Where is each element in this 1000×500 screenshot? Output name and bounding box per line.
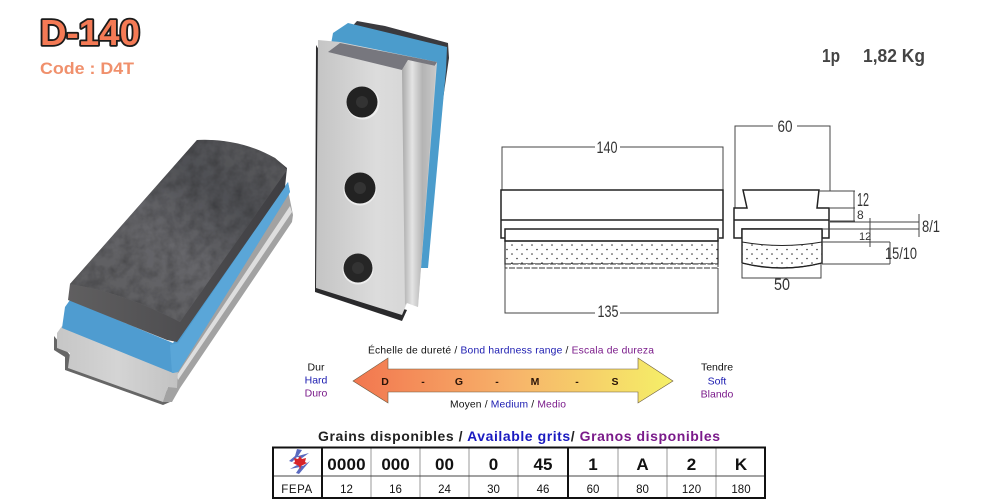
aluminium base front <box>57 326 178 402</box>
product code: Code : D4T <box>40 59 135 78</box>
grit codes: A <box>636 455 649 474</box>
FEPA values: 12 <box>340 484 353 496</box>
right dimensions: 8/1 <box>922 217 940 236</box>
right labels <box>701 362 734 400</box>
abrasive section <box>742 229 822 268</box>
grit codes: 0000 <box>327 455 366 474</box>
bolt 2 <box>344 172 376 206</box>
scale letters: - <box>421 376 425 388</box>
bolt 3 <box>342 254 374 284</box>
FEPA values: 180 <box>731 484 751 496</box>
dimension 135: 135 <box>598 302 618 321</box>
right dimensions: 12 <box>859 231 871 243</box>
grit heading: Grains disponibles / Available grits/ Granos disponibles <box>318 428 720 444</box>
scale letters: D <box>381 376 389 388</box>
aluminium stripe <box>177 206 292 380</box>
table grid <box>272 447 766 498</box>
scale letters: G <box>455 376 463 388</box>
FEPA values: 46 <box>537 484 549 496</box>
weight label: 1,82 Kg <box>863 46 925 66</box>
FEPA values: 80 <box>636 484 649 496</box>
right dimensions: 15/10 <box>885 244 917 263</box>
title: D-140 <box>40 12 140 53</box>
photo: abrasive block, aluminium side <box>315 21 449 321</box>
photo: abrasive block, top side <box>54 140 293 405</box>
dimension 50: 50 <box>774 275 790 294</box>
icon: company logo <box>289 449 310 474</box>
hardness scale <box>305 344 734 410</box>
rail <box>402 60 436 307</box>
scale letters: - <box>495 376 499 388</box>
dotted abrasive <box>505 241 718 264</box>
blue holder <box>330 23 447 268</box>
FEPA values: 16 <box>389 484 402 496</box>
right labels: Tendre <box>701 362 733 374</box>
dimension 60 <box>735 117 830 208</box>
dimension 140 <box>502 138 723 190</box>
scale letters <box>381 376 619 388</box>
grit codes: 000 <box>381 455 410 474</box>
scale heading: Échelle de dureté / Bond hardness range / Escala de dureza <box>368 344 654 356</box>
technical drawing: side view <box>501 138 723 321</box>
FEPA values: 60 <box>587 484 599 496</box>
right labels: Blando <box>701 388 734 400</box>
aluminium plate <box>316 40 437 315</box>
weight label <box>822 46 925 66</box>
grit codes: K <box>735 455 748 474</box>
blue holder <box>62 182 290 373</box>
holder <box>505 229 718 241</box>
dimension 50 <box>742 264 821 294</box>
medium label: Moyen / Medium / Medio <box>450 400 566 410</box>
left labels: Hard <box>305 374 328 386</box>
gradient double arrow <box>353 358 673 403</box>
aluminium base side <box>163 190 293 402</box>
dimension 135 <box>505 268 718 321</box>
dimension 60: 60 <box>778 117 792 136</box>
grit codes <box>327 455 748 474</box>
left labels: Dur <box>308 362 325 374</box>
left labels <box>305 362 328 400</box>
scale letters: - <box>575 376 579 388</box>
technical drawing: end view <box>734 117 940 294</box>
bolt 1 <box>346 86 380 120</box>
scale letters: M <box>531 376 540 388</box>
scale letters: S <box>611 376 619 388</box>
base shadow edge <box>315 45 407 321</box>
base shadow <box>54 336 172 405</box>
grit codes: 2 <box>687 455 696 474</box>
grit codes: 1 <box>588 455 598 474</box>
right dimensions: 12 <box>857 190 869 210</box>
upper plate <box>501 190 723 238</box>
left labels: Duro <box>305 388 328 400</box>
dimension 140: 140 <box>596 138 618 157</box>
grit codes: 45 <box>534 455 552 474</box>
FEPA values <box>281 484 751 496</box>
dark abrasive edge <box>340 21 449 120</box>
right dimensions <box>819 190 940 264</box>
bottom band <box>505 264 718 268</box>
grit codes: 0 <box>489 455 498 474</box>
right dimensions: 8 <box>857 208 864 222</box>
grit codes: 00 <box>435 455 454 474</box>
dovetail profile <box>734 190 829 238</box>
grit table <box>272 447 766 498</box>
right labels: Soft <box>708 376 726 388</box>
FEPA values: 120 <box>682 484 701 496</box>
weight label: 1p <box>822 46 840 66</box>
FEPA values: 24 <box>438 484 451 496</box>
FEPA values: 30 <box>487 484 500 496</box>
groove <box>328 43 437 70</box>
dark abrasive <box>68 140 287 342</box>
FEPA values: FEPA <box>281 484 313 496</box>
